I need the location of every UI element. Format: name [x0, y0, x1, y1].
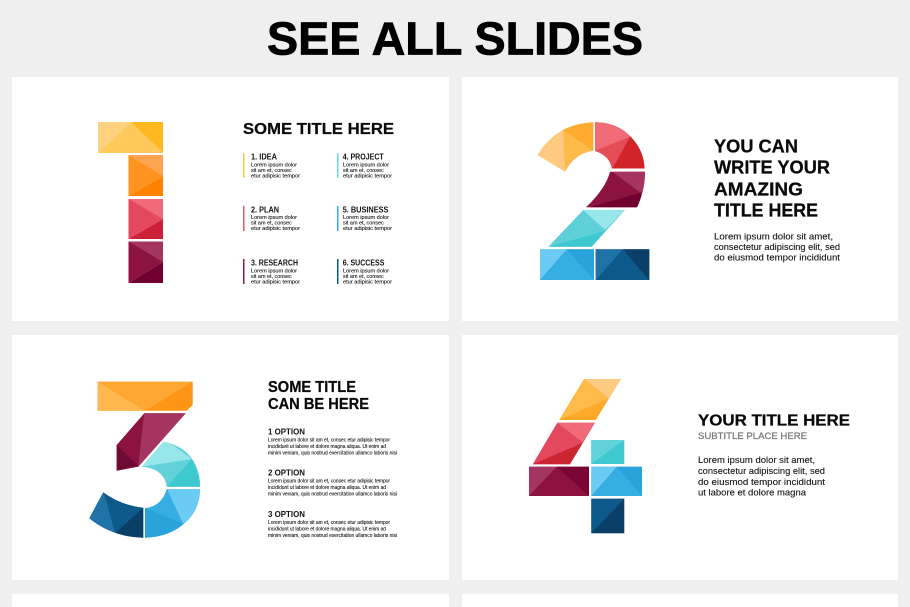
slide 3 title [268, 379, 369, 413]
option 2: minim veniam, quis nostrud exercitation ullamco laboris nisi [268, 491, 397, 497]
slide 3 title: CAN BE HERE [268, 396, 369, 413]
slide 2 title: YOU CAN [714, 136, 798, 156]
slide 2 body: Lorem ipsum dolor sit amet, [714, 231, 833, 241]
item: business: Lorem ipsum dolor [343, 215, 389, 221]
item: idea [243, 152, 300, 180]
panel: slide 4 [462, 335, 898, 580]
option 1: 1 OPTION [268, 426, 305, 436]
option 2: incididunt ut labore et dolore magna aliqua. Ut enim ad [268, 485, 386, 491]
option 3: 3 OPTION [268, 509, 305, 519]
numeral 1 [98, 122, 163, 283]
slide 2 title [714, 136, 830, 221]
panel: slide 3 [12, 335, 449, 580]
item: success: etur adipisic tempor [343, 279, 392, 285]
panel: slide 2 [462, 77, 898, 321]
option 1: Lorem ipsum dolor sit am et, consec etur adipisic tempor [268, 437, 390, 443]
option 3 [268, 509, 397, 539]
item: project: Lorem ipsum dolor [343, 162, 389, 168]
slide 4 subtitle: SUBTITLE PLACE HERE [698, 431, 807, 441]
item: success: 6. SUCCESS [343, 258, 384, 268]
slide 2 body [714, 231, 841, 263]
item: idea: etur adipisic tempor [251, 174, 300, 180]
item: project: etur adipisic tempor [343, 174, 392, 180]
slide 4 body: consectetur adipiscing elit, sed [698, 466, 825, 476]
item: research: sit am et, consec [251, 274, 292, 280]
block: navy [596, 249, 649, 280]
item: research [243, 258, 300, 285]
slide 4 body: do eiusmod tempor incididunt [698, 477, 826, 487]
item: business: etur adipisic tempor [343, 226, 392, 232]
item: plan: sit am et, consec [251, 221, 292, 227]
option 3: minim veniam, quis nostrud exercitation ullamco laboris nisi [268, 533, 397, 539]
option 2: 2 OPTION [268, 468, 305, 478]
option 2 [268, 468, 397, 497]
item: business: sit am et, consec [343, 221, 384, 227]
item: plan: etur adipisic tempor [251, 226, 300, 232]
slide 2 title: AMAZING [714, 180, 803, 200]
panel: slide 6 (cropped) [462, 594, 898, 607]
item: research: Lorem ipsum dolor [251, 268, 297, 274]
option 2: Lorem ipsum dolor sit am et, consec etur adipisic tempor [268, 478, 390, 484]
block: blue [540, 249, 594, 280]
slide 4 body [698, 455, 826, 498]
slide 4 title: YOUR TITLE HERE [698, 413, 850, 430]
option 1: minim veniam, quis nostrud exercitation ullamco laboris nisi [268, 450, 397, 456]
item: project [337, 152, 392, 180]
panel: slide 5 (cropped) [12, 594, 449, 607]
panel: slide 1 [12, 77, 449, 321]
item: idea: sit am et, consec [251, 168, 292, 174]
heading: SEE ALL SLIDES [267, 13, 643, 65]
item: success [337, 258, 392, 285]
slide 2 body: consectetur adipiscing elit, sed [714, 242, 840, 252]
item: project: sit am et, consec [343, 168, 384, 174]
item: research: 3. RESEARCH [251, 258, 298, 268]
numeral 3 [85, 382, 205, 540]
slide 2 title: WRITE YOUR [714, 158, 830, 178]
item: success: Lorem ipsum dolor [343, 268, 389, 274]
item: plan: 2. PLAN [251, 206, 279, 214]
option 3: incididunt ut labore et dolore magna aliqua. Ut enim ad [268, 526, 386, 532]
slide 4 body: ut labore et dolore magna [698, 488, 806, 498]
item: plan [243, 206, 300, 232]
item: research: etur adipisic tempor [251, 279, 300, 285]
slide 2 title: TITLE HERE [714, 201, 818, 221]
item: success: sit am et, consec [343, 274, 384, 280]
item: idea: Lorem ipsum dolor [251, 162, 297, 168]
slide 4 body: Lorem ipsum dolor sit amet, [698, 455, 815, 465]
slide 1 title: SOME TITLE HERE [243, 121, 394, 138]
slide 2 body: do eiusmod tempor incididunt [714, 253, 841, 263]
item: project: 4. PROJECT [343, 152, 384, 162]
option 1: incididunt ut labore et dolore magna aliqua. Ut enim ad [268, 444, 386, 450]
option 1 [268, 426, 397, 456]
slide 3 title: SOME TITLE [268, 379, 356, 396]
item: business [337, 206, 392, 232]
numeral 4 [529, 379, 642, 533]
item: plan: Lorem ipsum dolor [251, 215, 297, 221]
item: business: 5. BUSINESS [343, 206, 388, 214]
numeral 2 [538, 122, 650, 280]
item: idea: 1. IDEA [251, 152, 277, 162]
parallelogram: teal [548, 210, 625, 247]
option 3: Lorem ipsum dolor sit am et, consec etur adipisic tempor [268, 520, 390, 526]
